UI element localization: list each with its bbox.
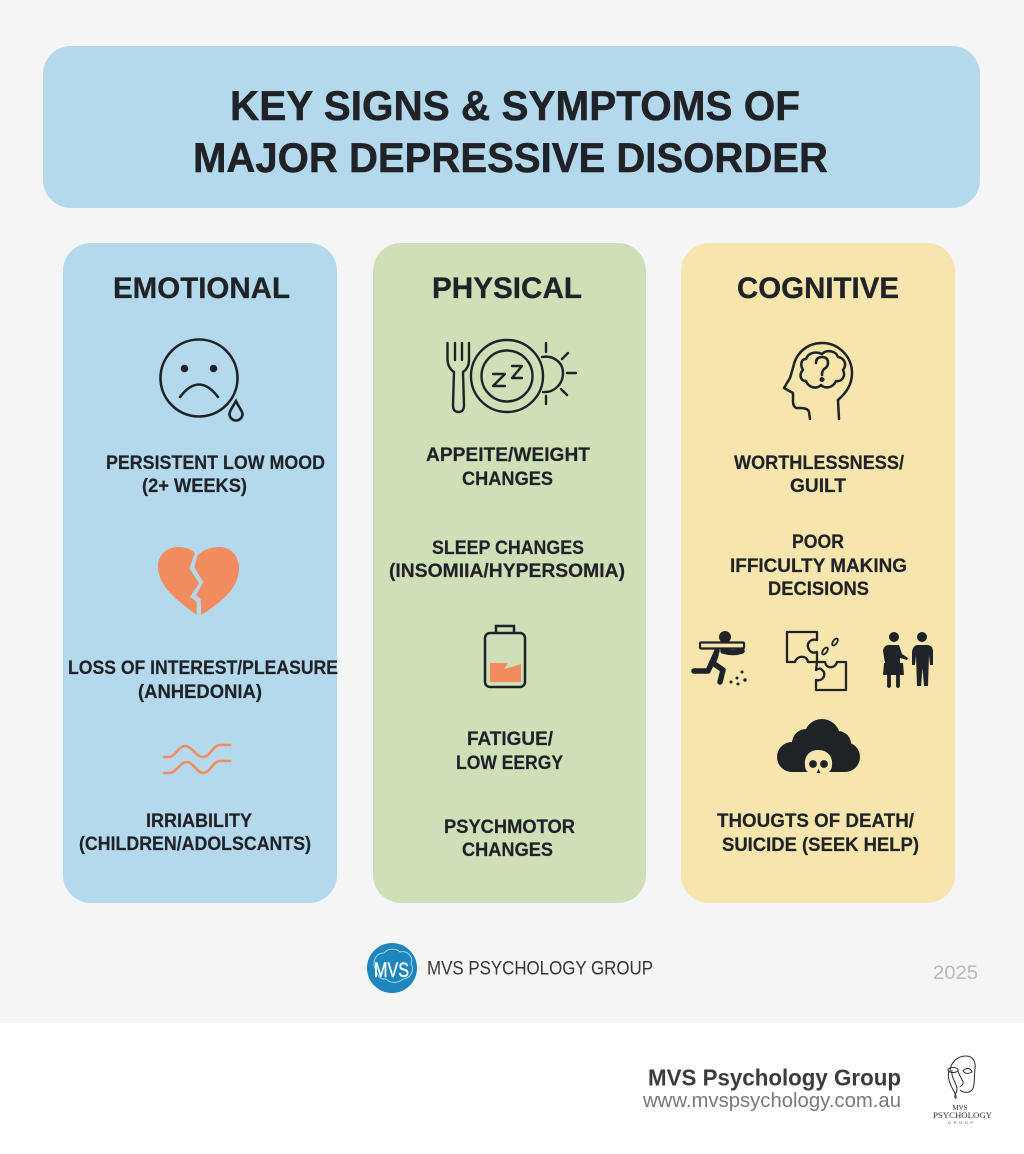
- icon: two people: [883, 632, 933, 686]
- text: appetite: [426, 444, 590, 490]
- icon: head with question mark: [784, 343, 852, 419]
- icon: broken heart: [158, 547, 239, 615]
- text: poor decisions: POOR: [792, 531, 844, 553]
- text: loss of interest: LOSS OF INTEREST/PLEASURE: [68, 657, 338, 679]
- text: sleep changes: SLEEP CHANGES: [432, 537, 584, 559]
- footer: line-art face logo: PSYCHOLOGY: [933, 1110, 992, 1120]
- panel: emotional: [63, 243, 338, 903]
- text: persistent low mood: [106, 452, 325, 497]
- icon: puzzle pieces: [787, 632, 846, 690]
- heading: physical: PHYSICAL: [432, 272, 582, 305]
- text: persistent low mood: (2+ WEEKS): [142, 475, 247, 497]
- heading: emotional: EMOTIONAL: [113, 272, 290, 305]
- text: persistent low mood: PERSISTENT LOW MOOD: [106, 452, 325, 474]
- text: sleep changes: (INSOMIIA/HYPERSOMIA): [389, 560, 625, 582]
- text: psychomotor: CHANGES: [462, 839, 553, 861]
- footer: line-art face logo: [933, 1056, 992, 1125]
- icon: fork, plate and sun: [448, 340, 576, 412]
- text: irritability: [79, 810, 311, 855]
- footer: organisation name: MVS Psychology Group: [648, 1064, 901, 1090]
- text: appetite: CHANGES: [462, 468, 553, 490]
- text: fatigue: LOW EERGY: [456, 752, 563, 774]
- text: thoughts of death: [717, 810, 919, 856]
- text: poor decisions: DECISIONS: [768, 578, 869, 600]
- panel: cognitive: [681, 243, 955, 903]
- text: psychomotor: [444, 816, 575, 861]
- footer: line-art face logo: MVS: [952, 1104, 968, 1112]
- year: 2025: [933, 963, 978, 984]
- text: psychomotor: PSYCHMOTOR: [444, 816, 575, 838]
- icon: cloud with skull: [777, 719, 860, 780]
- text: poor decisions: [730, 531, 907, 600]
- text: thoughts of death: SUICIDE (SEEK HELP): [722, 834, 919, 856]
- text: fatigue: [456, 728, 563, 774]
- title banner: KEY SIGNS & SYMPTOMS OF: [230, 82, 800, 129]
- logo: mvs brain badge: MVS: [374, 959, 409, 982]
- title banner: [43, 46, 980, 208]
- text: irritability: IRRIABILITY: [146, 810, 252, 832]
- heading: cognitive: COGNITIVE: [737, 272, 899, 305]
- icon: sad face with tear: [160, 340, 242, 420]
- icon: running figure: [694, 631, 747, 686]
- text: loss of interest: (ANHEDONIA): [138, 681, 262, 703]
- text: fatigue: FATIGUE/: [467, 728, 554, 750]
- text: worthlessness: GUILT: [790, 475, 846, 497]
- text: sleep changes: [389, 537, 625, 582]
- footer: line-art face logo: GROUP: [948, 1120, 973, 1125]
- text: appetite: APPEITE/WEIGHT: [426, 444, 590, 466]
- icon: irritability waves: [164, 745, 230, 773]
- title banner: MAJOR DEPRESSIVE DISORDER: [193, 134, 828, 181]
- logo wordmark: MVS PSYCHOLOGY GROUP: [427, 958, 653, 980]
- logo: mvs brain badge: [367, 943, 417, 993]
- text: poor decisions: IFFICULTY MAKING: [730, 555, 907, 577]
- text: worthlessness: WORTHLESSNESS/: [734, 452, 905, 474]
- panel: physical: [373, 243, 646, 903]
- text: worthlessness: [734, 452, 905, 497]
- text: loss of interest: [68, 657, 338, 703]
- text: irritability: (CHILDREN/ADOLSCANTS): [79, 833, 311, 855]
- footer: website: www.mvspsychology.com.au: [642, 1090, 901, 1112]
- icon: low battery: [485, 626, 525, 687]
- text: thoughts of death: THOUGTS OF DEATH/: [717, 810, 915, 832]
